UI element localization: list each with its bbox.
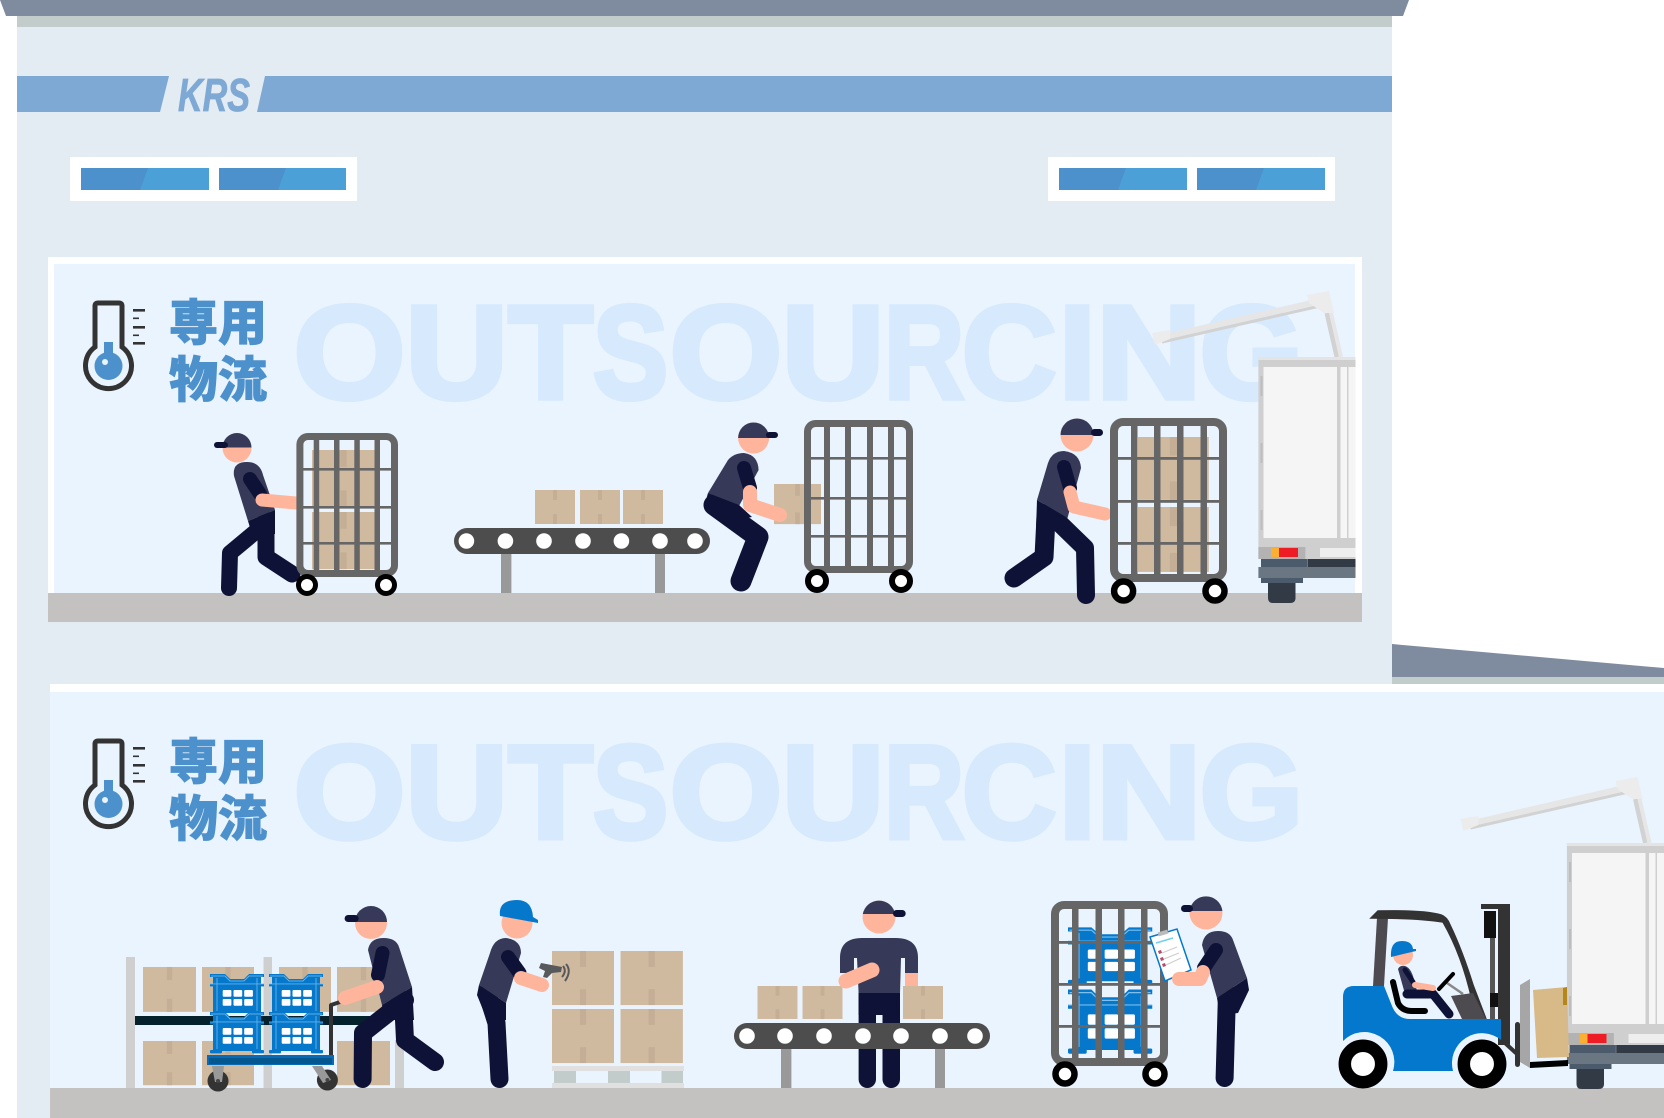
standing worker forearm xyxy=(846,970,872,981)
worker standing behind conveyor xyxy=(840,900,918,1088)
watermark: OUTSOURCING: N xyxy=(1096,719,1202,867)
icon: thermometer xyxy=(86,741,145,827)
conveyor with boxes xyxy=(734,986,990,1088)
forklift with driver xyxy=(1343,904,1569,1082)
panel: lower floor room xyxy=(50,684,1664,1118)
watermark: OUTSOURCING: O xyxy=(670,279,782,427)
watermark: OUTSOURCING: R xyxy=(884,719,964,867)
clipboard xyxy=(1150,929,1191,981)
driver xyxy=(1391,941,1449,1014)
watermark: OUTSOURCING: U xyxy=(782,719,884,867)
box being loaded xyxy=(774,484,821,524)
heading: dedicated logistics: 専用 xyxy=(169,736,267,790)
watermark: OUTSOURCING: T xyxy=(508,279,593,427)
watermark: OUTSOURCING: G xyxy=(1200,719,1303,867)
watermark: OUTSOURCING: O xyxy=(294,279,406,427)
heading: dedicated logistics: 物流 xyxy=(169,793,267,847)
floor xyxy=(48,593,1362,622)
worker checking clipboard xyxy=(1150,896,1249,1078)
panel: upper floor room xyxy=(48,257,1362,622)
main roof xyxy=(0,0,1409,27)
watermark: OUTSOURCING: U xyxy=(405,279,508,427)
worker loading box xyxy=(706,422,780,581)
watermark: OUTSOURCING: I xyxy=(1059,719,1096,867)
watermark: OUTSOURCING: R xyxy=(884,279,964,427)
icon: thermometer xyxy=(86,303,145,389)
watermark: OUTSOURCING: S xyxy=(593,719,668,867)
watermark: OUTSOURCING: T xyxy=(508,719,593,867)
load box xyxy=(1533,987,1569,1058)
worker pushing full cage xyxy=(1014,418,1105,595)
worker scanning boxes xyxy=(477,900,569,1079)
signage band with KRS logo xyxy=(17,69,1392,121)
window: right xyxy=(1048,157,1335,201)
worker pushing hand cart xyxy=(345,906,435,1079)
watermark: OUTSOURCING: O xyxy=(294,719,406,867)
watermark: OUTSOURCING: S xyxy=(593,279,668,427)
delivery truck rear xyxy=(1460,777,1664,1089)
forklift body xyxy=(1343,986,1501,1071)
empty roll cage xyxy=(808,423,910,590)
heading: dedicated logistics: 専用 xyxy=(169,297,267,351)
delivery truck rear xyxy=(1152,291,1356,603)
window: left xyxy=(70,157,357,201)
watermark: OUTSOURCING: O xyxy=(670,719,782,867)
watermark: OUTSOURCING: I xyxy=(1059,279,1096,427)
watermark: OUTSOURCING: N xyxy=(1096,279,1202,427)
signage band with KRS logo: KRS xyxy=(178,69,250,121)
watermark: OUTSOURCING: U xyxy=(782,279,884,427)
hand cart with crates xyxy=(207,974,340,1092)
storage shelf with boxes xyxy=(126,957,404,1088)
worker pushing cage xyxy=(214,433,296,588)
small side roof xyxy=(1392,644,1664,684)
watermark: OUTSOURCING: U xyxy=(405,719,508,867)
full roll cage xyxy=(1113,420,1225,600)
conveyor with boxes xyxy=(454,490,710,593)
watermark: OUTSOURCING: G xyxy=(1200,279,1303,427)
floor xyxy=(50,1088,1664,1118)
watermark: OUTSOURCING: C xyxy=(962,719,1057,867)
watermark: OUTSOURCING: C xyxy=(962,279,1057,427)
heading: dedicated logistics: 物流 xyxy=(169,354,267,408)
roll cage with blue crates xyxy=(1054,903,1166,1084)
roll cage with boxes xyxy=(298,436,394,594)
boxes on pallet xyxy=(552,951,684,1088)
